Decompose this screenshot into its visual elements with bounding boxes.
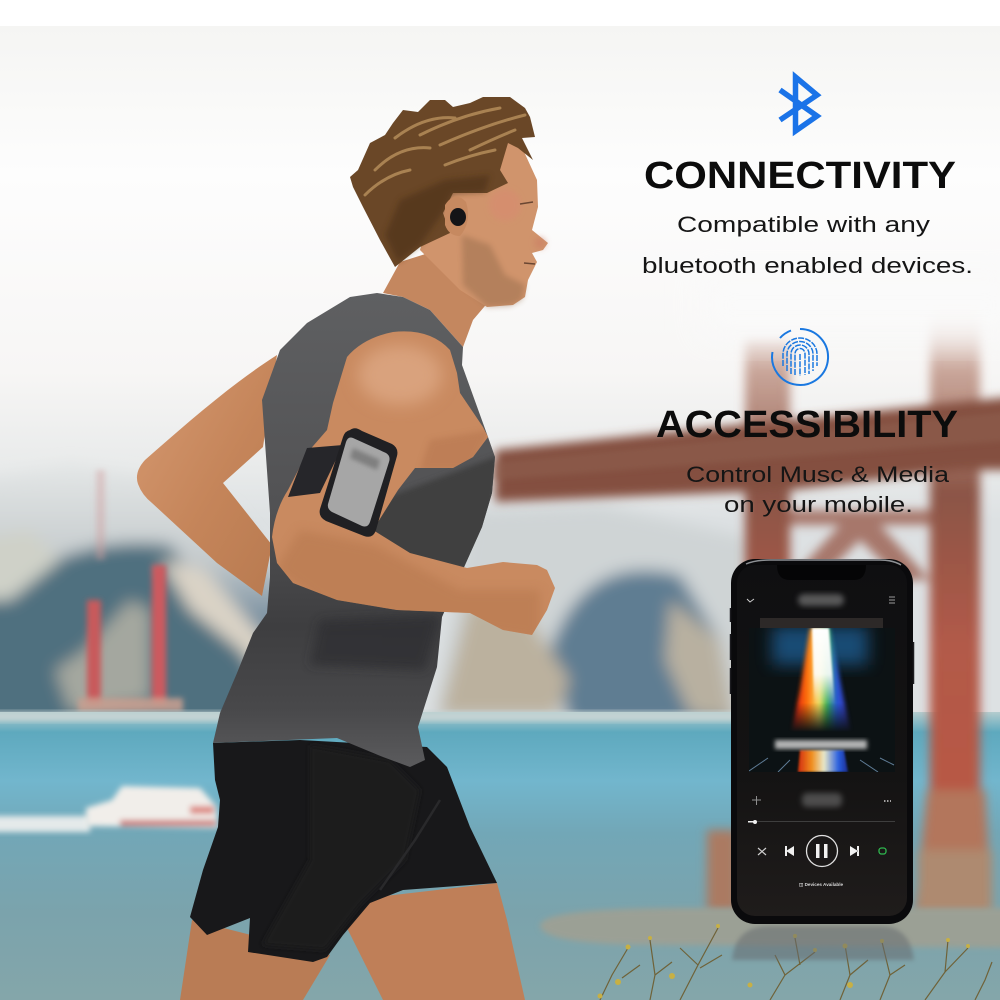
foreground dry grass <box>600 928 992 1000</box>
stubble <box>462 235 525 307</box>
blue glow <box>772 626 868 665</box>
shorts side panel <box>262 745 420 950</box>
smartphone <box>730 559 914 924</box>
neck <box>383 240 490 347</box>
hair highlights <box>365 108 525 195</box>
devices label: ◫ Devices Available <box>799 882 843 887</box>
heading: accessibility: ACCESSIBILITY <box>656 404 958 446</box>
cheek and nose tint <box>489 189 546 249</box>
blurred song title <box>802 793 842 807</box>
description: accessibility: on your mobile. <box>724 492 913 517</box>
hair <box>350 97 535 267</box>
collapse chevron <box>747 599 754 602</box>
album floor lines <box>749 758 894 772</box>
bridge towers <box>707 310 992 915</box>
bridge deck <box>495 394 1000 502</box>
fog over tower tops <box>746 316 982 356</box>
bridge pier <box>540 908 1000 948</box>
previous button <box>785 846 794 856</box>
blurred track header <box>798 594 844 606</box>
runner <box>137 97 555 1000</box>
description: connectivity <box>642 212 973 278</box>
arm shading <box>275 345 540 640</box>
album strip <box>760 618 883 629</box>
heading: connectivity: CONNECTIVITY <box>644 155 956 197</box>
progress bar <box>748 820 895 824</box>
description: connectivity: Compatible with any <box>677 212 930 237</box>
head <box>420 143 548 307</box>
reflected colours <box>798 750 848 772</box>
black earbud <box>450 208 466 226</box>
next button <box>850 846 859 856</box>
distant hills left <box>0 483 270 712</box>
distant hills right <box>432 504 744 712</box>
accessibility block <box>656 329 958 517</box>
description: accessibility: Control Musc & Media <box>686 462 950 487</box>
water <box>0 712 1000 1000</box>
phone body <box>731 559 913 924</box>
blurred album title <box>775 740 867 749</box>
armband strap <box>288 445 343 497</box>
more dots <box>884 800 891 802</box>
icon: bluetooth <box>780 77 817 131</box>
back arm <box>137 355 277 596</box>
connectivity block <box>642 77 973 278</box>
ear <box>445 197 468 236</box>
queue icon <box>889 597 895 603</box>
shorts <box>190 740 497 962</box>
screen <box>737 565 907 916</box>
shuffle icon <box>758 848 766 855</box>
distant left bridge towers <box>78 470 183 712</box>
description: connectivity: bluetooth enabled devices. <box>642 253 973 278</box>
phone reflection <box>732 926 914 960</box>
shorts pocket fold <box>380 800 440 890</box>
tank dark panels <box>310 455 500 670</box>
add icon <box>752 796 761 805</box>
side buttons <box>730 608 914 694</box>
icon: fingerprint <box>772 329 828 385</box>
prism beam <box>791 628 850 731</box>
tank top <box>213 293 495 767</box>
arm and chest <box>272 331 555 635</box>
description: accessibility <box>686 462 950 517</box>
armband pouch <box>320 428 397 537</box>
repeat icon <box>879 848 886 854</box>
back leg <box>180 920 330 1000</box>
golden gate bridge <box>495 310 1000 948</box>
notch <box>777 565 866 580</box>
hair shadow <box>385 175 490 262</box>
eye and mouth <box>520 202 535 264</box>
phone edge highlight <box>746 560 901 565</box>
ferry boat <box>86 786 218 828</box>
front leg <box>343 883 525 1000</box>
grass buds <box>598 924 970 998</box>
album art <box>749 626 895 772</box>
pause button <box>806 836 838 866</box>
